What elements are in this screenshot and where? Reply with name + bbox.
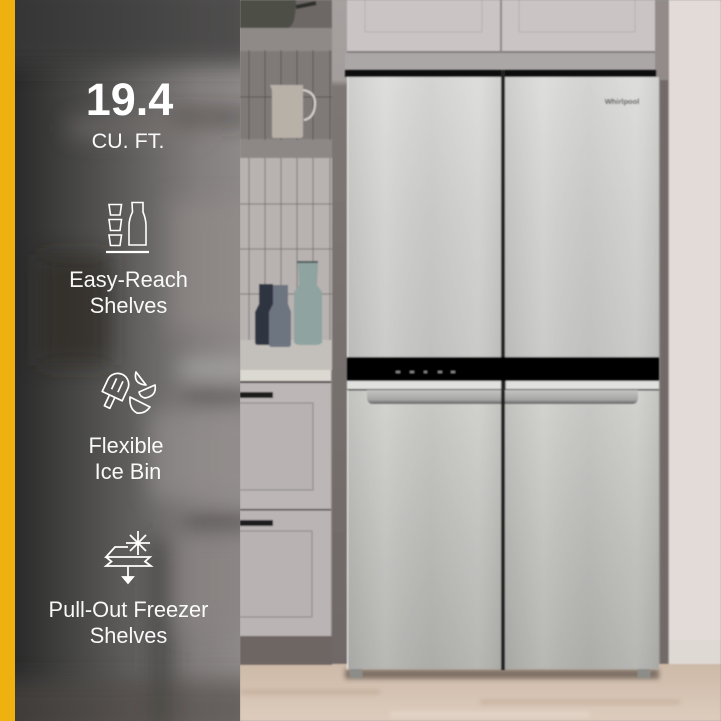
right wall <box>655 0 721 675</box>
feet <box>350 669 650 678</box>
glass bottle <box>294 262 322 345</box>
icon: cups and bottle on shelf <box>106 202 149 252</box>
label: Flexible <box>88 433 164 458</box>
control panel band <box>347 357 659 381</box>
label: Easy-Reach <box>69 267 188 292</box>
icon: snowflake over sliding shelf <box>106 531 151 583</box>
pot on shelf <box>240 0 316 28</box>
capacity stat: CU. FT. <box>92 129 164 153</box>
brand logo: Whirlpool <box>605 97 639 106</box>
base cabinets <box>240 381 332 665</box>
open shelving backsplash <box>240 0 332 343</box>
kitchen background <box>240 0 721 721</box>
top black trim <box>345 70 656 77</box>
upper left door <box>347 77 501 357</box>
handle <box>367 390 638 404</box>
capacity stat <box>86 74 173 153</box>
yellow accent bar <box>0 0 15 721</box>
capacity stat: 19.4 <box>86 74 173 125</box>
bottle dark <box>255 284 273 345</box>
feature: flexible ice bin <box>88 370 164 484</box>
feature: pull-out freezer shelves <box>49 531 208 648</box>
bottle grey <box>269 285 291 347</box>
feature: flexible ice bin: Ice Bin <box>95 459 161 484</box>
countertop with bottles <box>240 261 332 382</box>
icon: popsicle and ice wedges <box>97 370 155 413</box>
upper cabinets <box>345 0 658 70</box>
feature: easy-reach shelves: Shelves <box>90 293 167 318</box>
lower left door <box>347 390 501 669</box>
door gap <box>501 70 505 670</box>
door edge highlights <box>346 77 348 669</box>
side column <box>332 0 347 665</box>
drawer top strip <box>347 381 659 389</box>
blurred left overlay panel <box>0 0 260 721</box>
mug <box>270 85 315 138</box>
lower right door <box>505 390 659 669</box>
feature: pull-out freezer shelves: Shelves <box>90 623 167 648</box>
refrigerator <box>345 70 659 679</box>
floor <box>240 664 721 721</box>
feature: easy-reach shelves <box>69 202 188 318</box>
label: Pull-Out Freezer <box>49 597 208 622</box>
upper right door <box>505 77 659 357</box>
floor shadow <box>345 669 659 679</box>
